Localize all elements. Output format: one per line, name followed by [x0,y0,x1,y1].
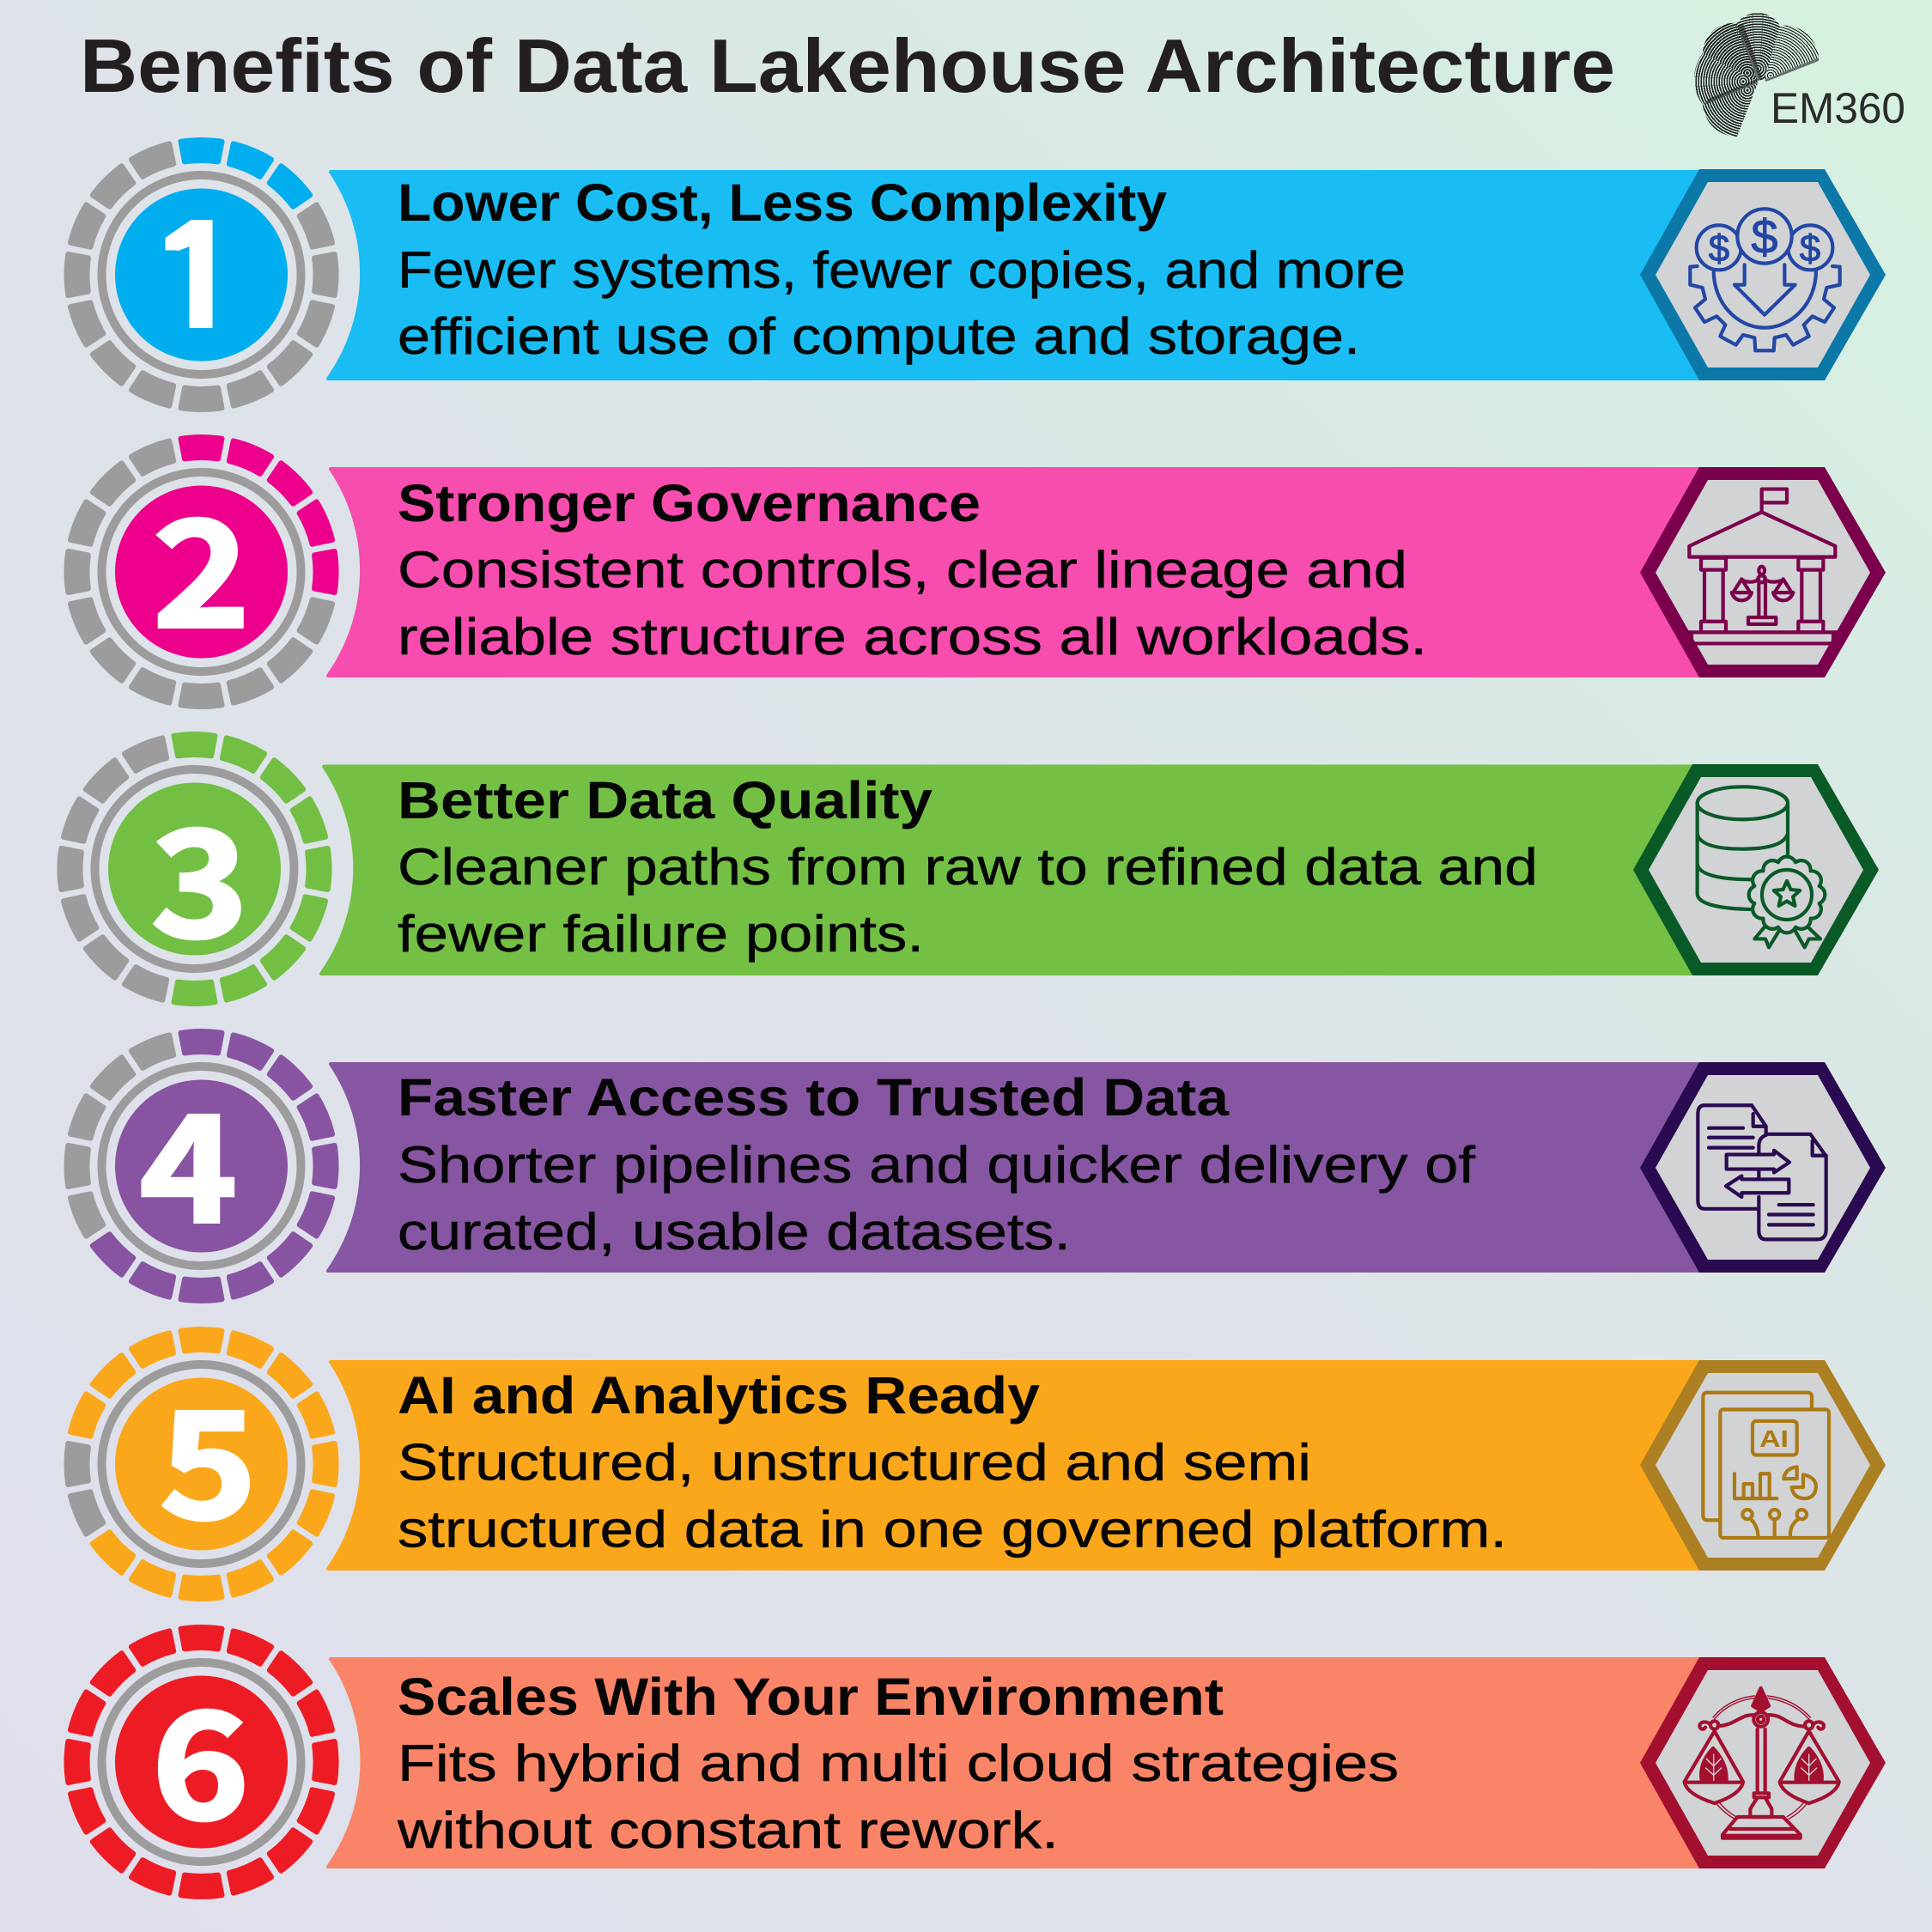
description 2: reliable structure across all workloads. [398,608,1427,665]
heading 4: Faster Access to Trusted Data [398,1068,1230,1127]
progress dial 6: 6 [152,1647,249,1862]
logo: EM360 [1694,13,1905,137]
description 3: Cleaner paths from raw to refined data and [398,838,1538,896]
icon: coins and gear cost reduction [1640,169,1886,380]
panel: faster access to trusted data [66,1031,1886,1301]
description 1: Fewer systems, fewer copies, and more [398,241,1406,299]
banner 4 [328,1064,1717,1271]
progress dial 5 [66,1329,337,1599]
progress dial 4 [66,1031,337,1301]
logo wordmark: EM360 [1771,84,1905,132]
panel: better data quality [59,734,1879,1004]
progress dial 1: 1 [144,156,241,371]
description 4: curated, usable datasets. [398,1203,1071,1261]
banner 6 [328,1659,1717,1867]
progress dial 1 [66,140,337,410]
icon: coins and gear cost reduction: $ [1751,210,1778,264]
description 5: Structured, unstructured and semi [398,1434,1311,1491]
heading 5: AI and Analytics Ready [398,1366,1040,1425]
progress dial 4: 4 [140,1050,237,1265]
description 4: Shorter pipelines and quicker delivery of [398,1136,1475,1194]
icon: coins and gear cost reduction: $ [1800,228,1820,270]
description 3: fewer failure points. [398,905,924,963]
panel: lower cost, less complexity [66,140,1886,410]
icon: AI analytics pages [1640,1360,1886,1571]
heading 2: Stronger Governance [398,474,981,532]
progress dial 3: 3 [151,765,248,980]
icon: coins and gear cost reduction: $ [1709,228,1729,270]
panel: AI and analytics ready [66,1329,1886,1599]
banner 1 [328,172,1717,379]
progress dial 5: 5 [160,1346,257,1561]
description 1: efficient use of compute and storage. [398,307,1360,365]
banner 3 [321,766,1710,974]
description 6: without constant rework. [397,1801,1059,1859]
title: Benefits of Data Lakehouse Architecture [80,23,1615,108]
panel: stronger governance [66,437,1886,707]
description 5: structured data in one governed platform. [398,1501,1507,1558]
panel: scales with your environment [66,1627,1886,1897]
heading 3: Better Data Quality [398,771,933,829]
icon: database with quality badge [1633,764,1879,975]
heading 6: Scales With Your Environment [398,1668,1224,1726]
icon: striped cloud mark [1694,13,1819,137]
description 6: Fits hybrid and multi cloud strategies [398,1735,1399,1792]
description 2: Consistent controls, clear lineage and [398,541,1407,598]
icon: document exchange [1640,1062,1886,1273]
heading 1: Lower Cost, Less Complexity [398,173,1167,232]
banner 5 [328,1362,1717,1569]
banner 2 [328,469,1717,676]
progress dial 6 [66,1627,337,1897]
progress dial 3 [59,734,330,1004]
icon: courthouse with scales [1640,467,1886,677]
icon: AI analytics pages: AI [1759,1425,1789,1452]
progress dial 2 [66,437,337,707]
progress dial 2: 2 [153,455,250,670]
icon: balance scales with leaves [1640,1657,1886,1868]
